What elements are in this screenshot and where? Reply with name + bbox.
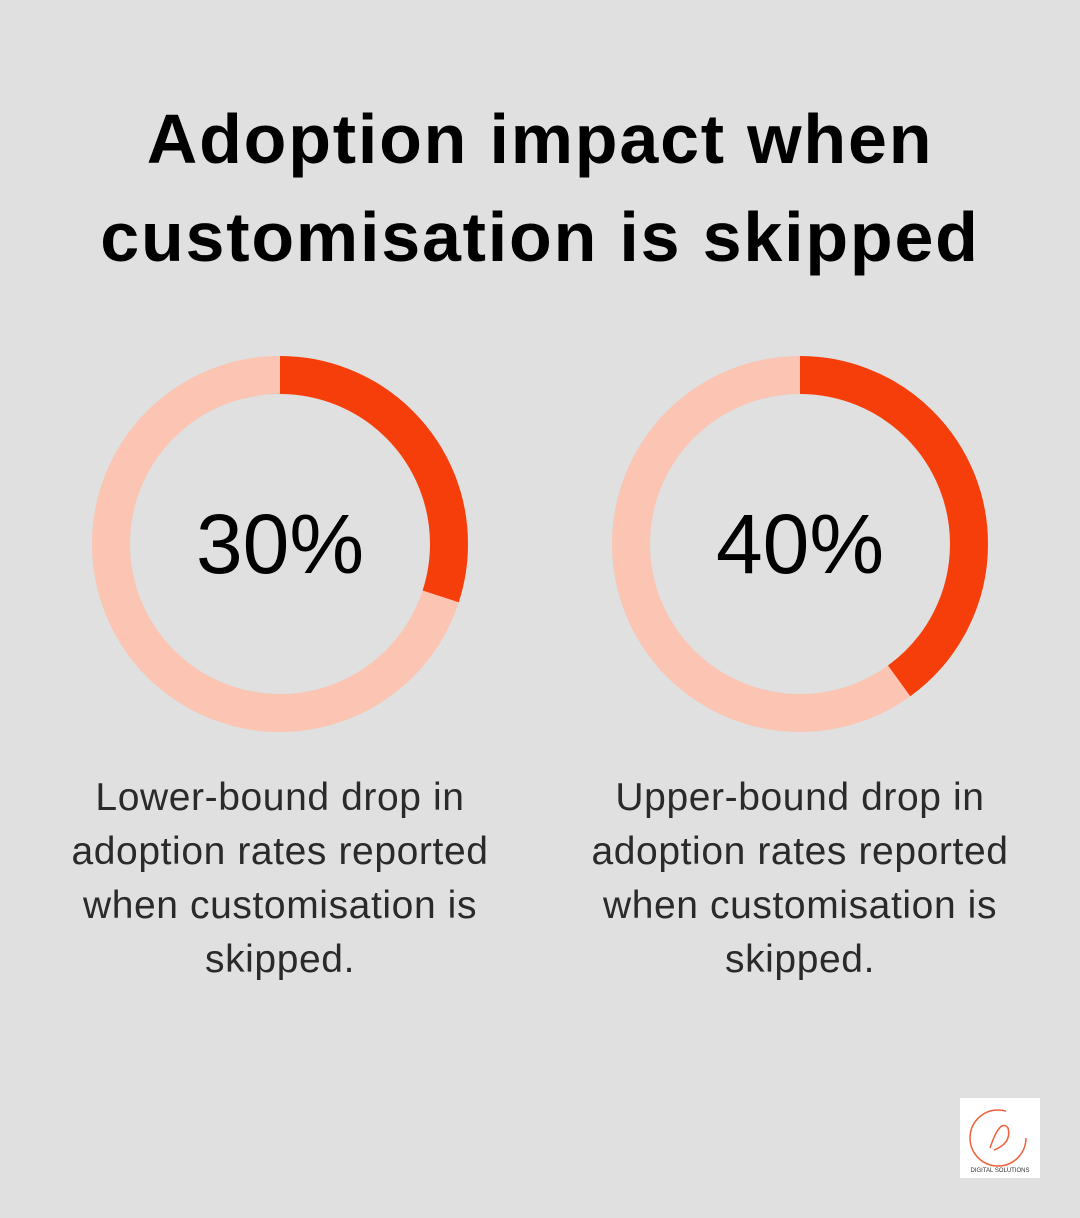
donut: 30% xyxy=(92,356,468,732)
logo: DIGITAL SOLUTIONS xyxy=(970,1168,1030,1174)
caption: upper bound: Upper-bound drop in adoption rates reported when customisation is skipped. xyxy=(591,776,1009,981)
value 40%: 40% xyxy=(716,497,884,591)
caption: lower bound: Lower-bound drop in adoption rates reported when customisation is skipped. xyxy=(71,776,489,981)
title: Adoption impact when xyxy=(147,100,933,178)
donut: 40% xyxy=(612,356,988,732)
title xyxy=(100,100,980,276)
value 30%: 30% xyxy=(196,497,364,591)
logo xyxy=(960,1098,1040,1178)
title: customisation is skipped xyxy=(100,198,980,276)
